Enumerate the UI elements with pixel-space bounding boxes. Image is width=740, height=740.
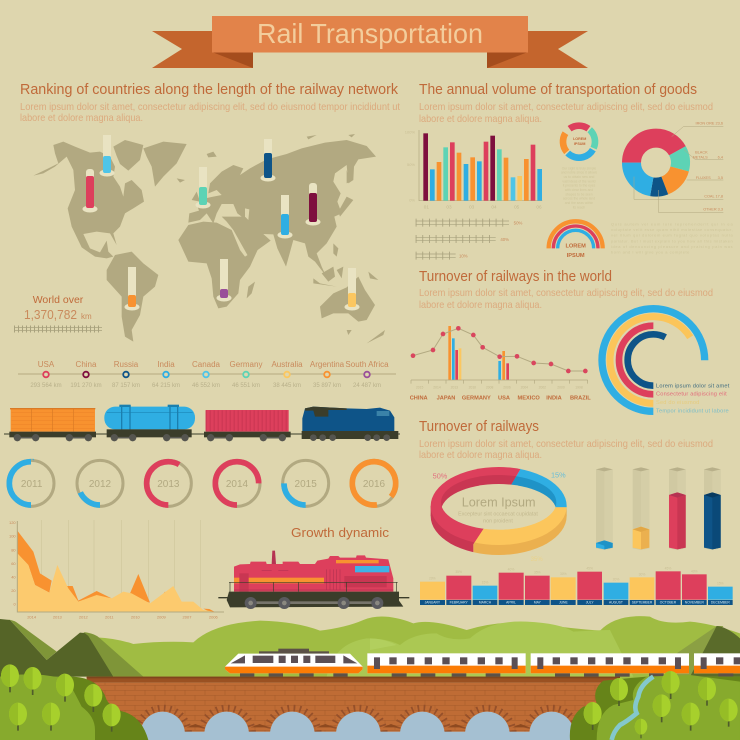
text block: small donut caption: across the whole land bbox=[563, 197, 595, 201]
bar chart: goods per period bbox=[405, 129, 542, 210]
line and bar chart: countries: 2008 bbox=[486, 385, 494, 389]
area chart: growth dynamic: 2007 bbox=[183, 614, 192, 619]
text block: goods footnote: born and I will give you a complete bbox=[611, 250, 690, 255]
text block: small donut caption: shapes to be seen bbox=[565, 192, 593, 196]
donut leader lines and legend: FLUXES bbox=[696, 176, 711, 180]
monthly bar chart: 15% bbox=[482, 581, 488, 585]
timeline: railway length by country: China bbox=[76, 360, 97, 369]
map thermometer: Germany bbox=[196, 167, 210, 208]
donut leader lines and legend: IRON ORE 23,6 bbox=[696, 121, 723, 125]
donut leader lines and legend: 3,5 bbox=[718, 176, 723, 180]
3d ring chart: Excepteur sint occaecat cupidatat bbox=[458, 512, 538, 518]
line and bar chart: countries: MEXICO bbox=[518, 395, 540, 401]
text block: small donut caption: us to obtain new and bbox=[564, 175, 595, 179]
bar chart: goods per period: 06 bbox=[536, 205, 542, 210]
3d ring chart: 50% bbox=[433, 471, 448, 480]
freight wagon: blue tanker bbox=[104, 405, 195, 441]
callout: world over total: km bbox=[81, 312, 92, 321]
text block: goods footnote bbox=[611, 221, 733, 255]
donut leader lines and legend: 6,4 bbox=[718, 155, 724, 159]
line and bar chart: countries: BRAZIL bbox=[570, 395, 591, 401]
3d ring chart bbox=[431, 467, 567, 563]
bar chart: goods per period: 50% bbox=[407, 162, 415, 167]
title ribbon bbox=[152, 16, 588, 68]
trees left bbox=[1, 664, 121, 732]
locomotive: blue diesel bbox=[302, 407, 398, 441]
title ribbon: Rail Transportation bbox=[257, 18, 483, 49]
text block: goods footnote: idea of denouncing pleasure and praising pain was bbox=[611, 244, 733, 249]
ring gauge: 2016 bbox=[350, 459, 398, 508]
radial chart legend: Lorem ipsum dolor sit amet bbox=[656, 384, 730, 390]
text block: small donut caption: it presents to the eyes bbox=[563, 184, 596, 188]
line and bar chart: countries: 2006 bbox=[503, 385, 511, 389]
foreground bushes right bbox=[570, 675, 740, 740]
donut leader lines and legend bbox=[634, 121, 724, 213]
text block: annual volume description: labore et dolore magna aliqua. bbox=[419, 113, 542, 125]
heading: turnover in the world: Turnover of railways in the world bbox=[419, 269, 612, 285]
3d ring chart: Lorem Ipsum bbox=[462, 496, 536, 510]
text block: small donut caption: with clear lines and bbox=[565, 188, 593, 192]
text block: ranking description: labore et dolore magna aliqua. bbox=[20, 112, 143, 124]
3d ring chart: 35% bbox=[531, 557, 543, 563]
monthly bar chart: APRIL bbox=[506, 601, 516, 605]
text block: ranking description bbox=[20, 101, 400, 124]
3d column chart bbox=[596, 467, 721, 550]
radial chart legend: Tempor incididunt ut labore bbox=[656, 408, 729, 414]
area chart: growth dynamic: 2014 bbox=[27, 614, 37, 619]
area chart: growth dynamic: 80 bbox=[11, 547, 16, 552]
panel: yearly ring gauges bbox=[8, 459, 398, 508]
monthly bar chart bbox=[420, 566, 733, 605]
heading: growth dynamic: Growth dynamic bbox=[291, 525, 390, 540]
radial bar chart bbox=[602, 309, 730, 414]
radial chart legend: Consectetur adipiscing elit bbox=[656, 392, 727, 398]
timeline: railway length by country: Argentina bbox=[310, 360, 345, 369]
timeline: railway length by country: India bbox=[157, 360, 175, 369]
map thermometer: India bbox=[278, 195, 292, 238]
monthly bar chart: JULY bbox=[586, 601, 594, 605]
text block: goods footnote: pariatur. But I must explain to you how all this mistaken bbox=[611, 238, 733, 243]
text block: turnover in the world description bbox=[419, 287, 713, 311]
monthly bar chart: JUNE bbox=[559, 601, 568, 605]
foreground bushes left bbox=[0, 674, 148, 740]
monthly bar chart: OCTOBER bbox=[660, 601, 677, 605]
bar chart: goods per period: 04 bbox=[491, 205, 497, 210]
area chart: growth dynamic: 40 bbox=[11, 575, 16, 580]
timeline: railway length by country: 293 564 km bbox=[30, 383, 62, 389]
monthly bar chart: 20% bbox=[429, 577, 436, 581]
text block: small donut caption: and noble since it allows bbox=[561, 171, 597, 175]
map thermometer: USA bbox=[82, 169, 98, 212]
mountains left bbox=[0, 619, 143, 677]
timeline: railway length by country: 191 270 km bbox=[70, 383, 102, 389]
bar chart: goods per period: 03 bbox=[469, 205, 475, 210]
rail progress bars: 50% bbox=[514, 221, 522, 226]
monthly bar chart: NOVEMBER bbox=[685, 601, 704, 605]
radial chart legend bbox=[656, 384, 730, 414]
monthly bar chart: MARCH bbox=[479, 601, 492, 605]
map thermometer: Canada bbox=[100, 135, 114, 176]
timeline: railway length by country bbox=[18, 360, 396, 389]
line and bar chart: countries: 2015 bbox=[416, 385, 424, 389]
timeline: railway length by country: Canada bbox=[192, 360, 221, 369]
monthly bar chart: 35% bbox=[534, 571, 541, 575]
monthly bar chart: 40% bbox=[691, 569, 698, 573]
text block: turnover description bbox=[419, 438, 713, 461]
ring gauge: 2014: 2014 bbox=[226, 479, 249, 490]
text block: small donut caption: Our sight is truly simple bbox=[562, 166, 596, 170]
train locomotive bbox=[225, 649, 363, 677]
monthly bar chart: 45% bbox=[586, 567, 593, 571]
timeline: railway length by country: Germany bbox=[230, 360, 262, 369]
timeline: railway length by country: 35 897 km bbox=[313, 383, 341, 389]
brick railway bridge bbox=[87, 677, 627, 740]
monthly bar chart: DECEMBER bbox=[711, 601, 730, 605]
bar chart: goods per period: 01 bbox=[424, 205, 429, 210]
ring gauge: 2012 bbox=[77, 460, 123, 506]
map thermometer: Russia bbox=[260, 139, 276, 182]
monthly bar chart: 45% bbox=[665, 566, 671, 570]
line and bar chart: countries: 1998 bbox=[575, 385, 583, 389]
callout: world over total: World over bbox=[33, 294, 84, 306]
heading: annual volume: The annual volume of transportation of goods bbox=[419, 82, 697, 98]
train carriages bbox=[367, 653, 740, 677]
area chart: growth dynamic: 2012 bbox=[79, 614, 89, 619]
line and bar chart: countries: USA bbox=[498, 395, 510, 401]
text block: turnover in the world description: labore et dolore magna aliqua. bbox=[419, 299, 542, 311]
bar chart: goods per period: 100% bbox=[405, 129, 415, 134]
area chart: growth dynamic: 2009 bbox=[157, 614, 167, 619]
panel: annual volume of goods bbox=[405, 82, 733, 259]
map thermometer: China bbox=[306, 183, 320, 226]
bar chart: goods per period: 05 bbox=[514, 205, 520, 210]
ring gauge: 2011 bbox=[8, 460, 54, 506]
text block: small donut caption: vast ideas of the world bbox=[562, 179, 596, 183]
ring gauge: 2015: 2015 bbox=[295, 479, 317, 490]
bar chart: goods per period: 03 bbox=[446, 205, 452, 210]
area chart: growth dynamic: 2011 bbox=[105, 614, 114, 619]
map thermometer: Argentina bbox=[124, 267, 140, 310]
callout: world over total: 1,370,782 bbox=[24, 307, 77, 322]
monthly bar chart: MAY bbox=[534, 601, 542, 605]
line and bar chart: countries: JAPAN bbox=[437, 395, 455, 401]
text block: small donut caption: its reach bbox=[573, 205, 585, 209]
text block: goods footnote: vel illum qui dolorem eum fugiat quo voluptas nulla bbox=[611, 233, 733, 238]
panel: ranking of countries bbox=[14, 82, 400, 343]
line and bar chart: countries: 2010 bbox=[469, 385, 476, 389]
passenger train bbox=[225, 649, 740, 677]
radial chart legend: Sed do eiusmod bbox=[656, 400, 699, 406]
line and bar chart: countries: CHINA bbox=[410, 395, 428, 401]
timeline: railway length by country: 24 487 km bbox=[353, 383, 381, 389]
area chart: growth dynamic: 2006 bbox=[209, 614, 219, 619]
monthly bar chart: 15% bbox=[717, 582, 724, 586]
monthly bar chart: 35% bbox=[455, 570, 462, 574]
area chart: growth dynamic: 2013 bbox=[53, 614, 63, 619]
text block: goods footnote: Quis autem vel eum iure reprehenderit qui in ea bbox=[611, 221, 733, 226]
area chart: growth dynamic: 20 bbox=[11, 588, 16, 593]
timeline: railway length by country: Russia bbox=[114, 360, 139, 369]
ring gauge: 2014 bbox=[214, 460, 260, 506]
small donut: lorem ipsum: IPSUM bbox=[574, 142, 585, 146]
timeline: railway length by country: 87 157 km bbox=[112, 383, 140, 389]
heading: turnover of railways: Turnover of railways bbox=[419, 419, 539, 435]
text block: annual volume description bbox=[419, 101, 713, 125]
line and bar chart: countries: 2014 bbox=[433, 385, 441, 389]
timeline: railway length by country: 38 445 km bbox=[273, 383, 301, 389]
ring gauge: 2011: 2011 bbox=[21, 479, 43, 490]
monthly bar chart: FEBRUARY bbox=[450, 601, 468, 605]
river bbox=[612, 677, 653, 740]
donut leader lines and legend: OTHER 3,3 bbox=[703, 207, 723, 211]
area chart: growth dynamic bbox=[9, 520, 224, 619]
ring gauge: 2016: 2016 bbox=[363, 479, 386, 490]
line and bar chart: countries: 2013 bbox=[451, 385, 458, 389]
monthly bar chart: JANUARY bbox=[425, 601, 441, 605]
area chart: growth dynamic: 60 bbox=[11, 561, 16, 566]
donut leader lines and legend: COAL 17,8 bbox=[704, 194, 723, 198]
bar chart: goods per period: 0% bbox=[409, 197, 415, 202]
timeline: railway length by country: 46 551 km bbox=[232, 383, 260, 389]
ring gauge: 2013 bbox=[145, 460, 191, 506]
illustration: freight train bbox=[4, 405, 400, 441]
line and bar chart: countries: INDIA bbox=[546, 395, 562, 401]
rainbow gauge: lorem ipsum: LOREM bbox=[565, 244, 586, 250]
ring gauge: 2013: 2013 bbox=[157, 479, 180, 490]
line and bar chart: countries: GERMANY bbox=[462, 395, 491, 401]
timeline: railway length by country: USA bbox=[38, 360, 55, 369]
area chart: growth dynamic: 0 bbox=[13, 602, 16, 607]
illustration: landscape with bridge and passenger train bbox=[0, 616, 740, 740]
text block: turnover description: labore et dolore magna aliqua. bbox=[419, 449, 542, 461]
panel: turnover of railways in the world bbox=[410, 269, 730, 414]
rainbow gauge: lorem ipsum: IPSUM bbox=[567, 253, 585, 259]
panel: turnover of railways bbox=[419, 419, 733, 605]
monthly bar chart: SEPTEMBER bbox=[632, 601, 653, 605]
small donut: lorem ipsum: LOREM bbox=[573, 137, 586, 141]
monthly bar chart: 30% bbox=[560, 572, 567, 576]
freight wagon: orange boxcar bbox=[9, 408, 96, 441]
small donut: lorem ipsum bbox=[556, 119, 602, 164]
line and bar chart: countries: 2002 bbox=[539, 385, 546, 389]
line and bar chart: countries: 2000 bbox=[557, 385, 565, 389]
text block: small donut caption: and the seas within bbox=[565, 201, 593, 205]
ring gauge: 2015 bbox=[283, 460, 329, 506]
text block: small donut caption bbox=[561, 166, 597, 209]
line and bar chart: countries bbox=[410, 326, 591, 401]
area chart: growth dynamic: 120 bbox=[9, 520, 16, 525]
rail progress bars bbox=[416, 221, 522, 259]
heading: ranking: Ranking of countries along the length of the railway network bbox=[20, 82, 399, 98]
map thermometer: Australia bbox=[344, 268, 360, 310]
text block: goods footnote: voluptate velit esse quam nihil molestiae consequatur, bbox=[611, 227, 733, 232]
freight wagon: red container bbox=[204, 410, 291, 441]
donut leader lines and legend: METALS bbox=[693, 155, 708, 159]
rail progress bars: 10% bbox=[459, 254, 468, 259]
monthly bar chart: 30% bbox=[639, 572, 645, 576]
3d ring chart: 15% bbox=[551, 471, 566, 480]
text block: ranking description: Lorem ipsum dolor sit amet, consectetur adipiscing elit, sed do eiusmod tempor incididunt ut bbox=[20, 101, 400, 113]
illustration: red locomotive bbox=[218, 551, 409, 609]
timeline: railway length by country: 46 552 km bbox=[192, 383, 220, 389]
mountain right bbox=[677, 626, 740, 677]
3d ring chart: non proident bbox=[483, 519, 513, 525]
donut chart: goods breakdown bbox=[623, 121, 724, 213]
area chart: growth dynamic: 2010 bbox=[131, 614, 141, 619]
trees right bbox=[584, 671, 738, 738]
line and bar chart: countries: 2004 bbox=[521, 385, 528, 389]
timeline: railway length by country: Australia bbox=[271, 360, 303, 369]
background hills bbox=[97, 616, 740, 680]
area chart: growth dynamic: 100 bbox=[9, 534, 16, 539]
monthly bar chart: 40% bbox=[508, 568, 514, 572]
timeline: railway length by country: South Africa bbox=[345, 360, 389, 369]
donut leader lines and legend: BLACK bbox=[695, 150, 708, 154]
timeline: railway length by country: 64 215 km bbox=[152, 383, 180, 389]
ring gauge: 2012: 2012 bbox=[89, 479, 112, 490]
world map bbox=[33, 134, 385, 343]
map thermometer: South Africa bbox=[216, 259, 232, 302]
rail progress bars: 40% bbox=[500, 237, 509, 242]
monthly bar chart: 20% bbox=[613, 578, 619, 582]
monthly bar chart: AUGUST bbox=[609, 601, 623, 605]
callout: world over total bbox=[14, 294, 102, 330]
rainbow gauge: lorem ipsum bbox=[549, 221, 603, 259]
